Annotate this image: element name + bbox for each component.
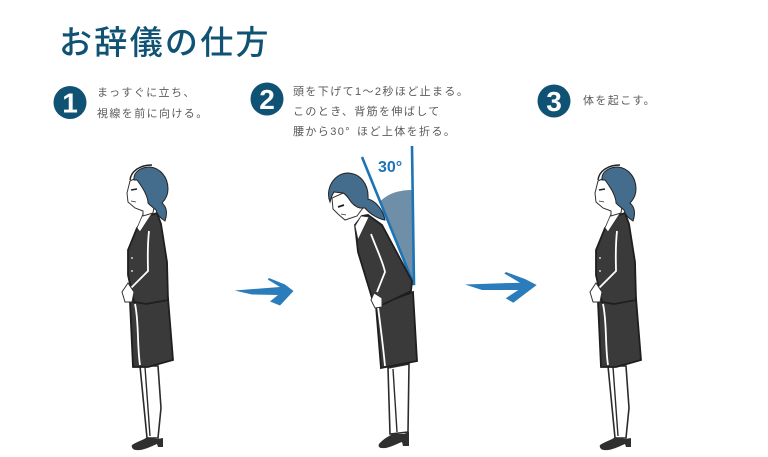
jacket buttons: [131, 257, 133, 272]
step 2 number badge: 2: [259, 84, 275, 115]
face: [127, 175, 156, 216]
angle label: 30°: [378, 159, 402, 176]
mouth: [341, 214, 346, 215]
step 1: [54, 85, 209, 120]
jacket: [596, 213, 636, 304]
mouth: [599, 201, 604, 202]
step 3: [538, 84, 656, 118]
step 2: [250, 82, 469, 138]
step 1 number badge: [54, 86, 86, 119]
jacket highlights: [371, 234, 385, 366]
collar: [605, 212, 621, 232]
step 3 number badge: 3: [546, 86, 562, 117]
step 1 text: まっすぐに立ち、: [97, 85, 196, 99]
hair: [134, 167, 168, 221]
hand: [371, 293, 382, 308]
angle lines: [362, 146, 414, 285]
step 2 text: [293, 84, 469, 138]
step 3 text: 体を起こす。: [583, 93, 656, 107]
step 2 text: このとき、背筋を伸ばして: [293, 104, 441, 118]
shoes: [132, 437, 163, 450]
shoes: [600, 437, 631, 450]
hair: [329, 173, 385, 220]
jacket buttons: [599, 257, 601, 272]
eye: [131, 189, 137, 190]
hair: [602, 167, 636, 221]
collar: [355, 216, 369, 240]
eye: [599, 189, 605, 190]
legs: [140, 366, 161, 438]
step 1 text: 視線を前に向ける。: [97, 106, 209, 120]
jacket highlights: [599, 231, 617, 365]
skirt: [130, 298, 173, 367]
collar: [137, 212, 153, 232]
step 2 text: 頭を下げて1～2秒ほど止まる。: [293, 84, 469, 98]
step 2 number badge: [250, 82, 284, 116]
figure: standing woman, step 3: [590, 165, 641, 450]
title: お辞儀の仕方: [59, 24, 271, 61]
skirt: [376, 292, 417, 368]
arrow 1: [234, 278, 294, 306]
eye: [338, 205, 344, 207]
hand: [122, 283, 134, 302]
jacket: [355, 215, 412, 305]
leg inner line: [393, 369, 397, 432]
step 2 text: 腰から30° ほど上体を折る。: [293, 124, 456, 138]
shoes: [379, 432, 409, 448]
step 1 text: [97, 85, 209, 120]
legs: [388, 364, 409, 434]
jacket highlights: [131, 231, 149, 365]
angle wedge: [380, 190, 414, 285]
leg inner line: [613, 367, 618, 436]
jacket: [128, 213, 168, 304]
figure: bowing woman, step 2: [329, 146, 417, 448]
hand: [590, 283, 602, 302]
hair outline: [130, 165, 152, 180]
hair outline: [598, 165, 620, 180]
step 1 number badge: 1: [62, 88, 78, 118]
mouth: [131, 201, 136, 202]
face: [332, 190, 365, 220]
legs: [608, 366, 629, 438]
arrow 2: [465, 272, 537, 303]
skirt: [598, 298, 641, 367]
leg inner line: [145, 367, 150, 436]
face: [595, 175, 624, 216]
figure: standing woman, step 1: [122, 165, 173, 450]
